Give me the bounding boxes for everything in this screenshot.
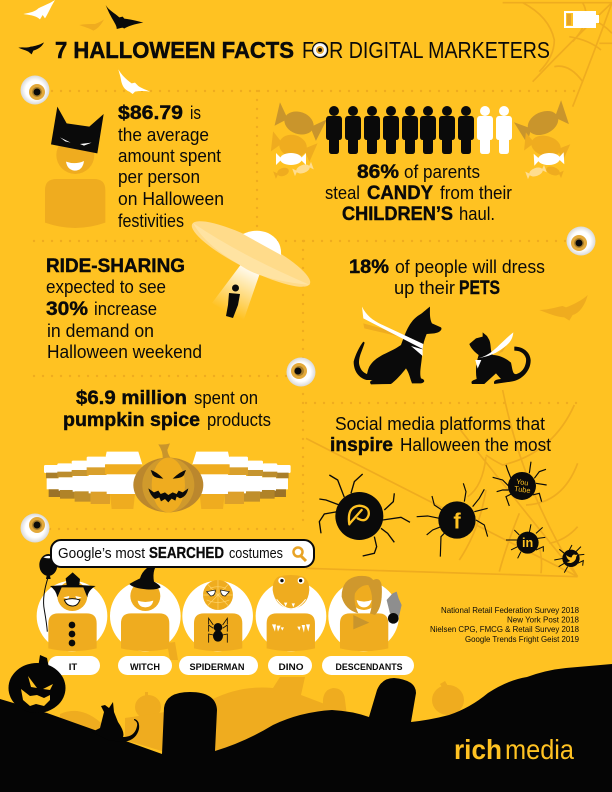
icon: Pinterest spider [319, 474, 410, 556]
title [55, 37, 550, 63]
costume labels: SPIDERMAN [190, 662, 245, 673]
icon: person in bat mask [45, 107, 105, 228]
icon: LinkedIn spider [506, 524, 545, 558]
icon: YouTube spider: You [516, 477, 529, 487]
sources: Nielsen CPG, FMCG & Retail Survey 2018 [430, 624, 579, 634]
panel: batman spending [45, 103, 224, 231]
text: pets stat: PETS [459, 278, 500, 299]
spider web: top right [503, 3, 612, 107]
text: social media heading: Halloween the most [400, 435, 551, 455]
text: pets stat [349, 257, 545, 299]
panel: social media spiders [319, 414, 584, 573]
icon: candies left [268, 102, 327, 179]
icon: battery [565, 12, 599, 27]
text: ride-sharing stat: 30% [46, 299, 88, 320]
icon: magnifier [294, 548, 306, 561]
icon: faint bat [539, 295, 588, 321]
black graveyard ground with tombstones [0, 664, 612, 792]
text: ride-sharing stat: Halloween weekend [47, 342, 202, 362]
text: pumpkin spice stat [63, 388, 271, 431]
icon: LinkedIn spider: in [522, 536, 533, 550]
icon: black jack-o-lantern [8, 655, 66, 713]
dotted dividers [34, 91, 578, 529]
icon: eyeball right [566, 226, 596, 256]
icon: abducted person [226, 284, 240, 318]
costume labels: WITCH [130, 662, 160, 673]
panel: ride-sharing [46, 211, 317, 362]
text: pumpkin spice stat: pumpkin spice [63, 410, 200, 431]
costume labels: DESCENDANTS [336, 662, 402, 673]
icon: row of ten people [326, 106, 512, 154]
icon: YouTube spider [493, 462, 547, 506]
icon: Facebook spider [417, 483, 488, 557]
text: candy stat: of parents [404, 162, 480, 182]
costume labels [48, 656, 414, 675]
text: pets stat: 18% [349, 257, 389, 278]
spider web: lower right [306, 390, 578, 577]
costume labels: IT [69, 662, 77, 673]
text: pumpkin spice stat: spent on [194, 388, 258, 408]
search bar: costumes [229, 545, 283, 562]
logo: richmedia [454, 734, 574, 765]
icon: dog and cat in capes [354, 307, 531, 384]
title: 7 HALLOWEEN FACTS [55, 37, 294, 63]
text: pets stat: up their [394, 278, 455, 298]
icon: eyeball top left [20, 76, 50, 104]
icon: candies right [514, 100, 572, 179]
text: ride-sharing stat: increase [94, 299, 157, 319]
text: ride-sharing stat: RIDE-SHARING [46, 256, 185, 277]
logo: richmedia: rich [454, 734, 502, 765]
costume: dino [267, 575, 315, 651]
text: social media heading: inspire [330, 435, 393, 456]
icon: eyeball lower left [20, 514, 50, 542]
text: candy stat: steal [325, 183, 360, 203]
text: candy stat: CHILDREN’S [342, 204, 453, 225]
panel: pumpkin spice [44, 388, 291, 512]
text: average spend: on Halloween [118, 189, 224, 209]
panel: parents steal candy [268, 100, 572, 225]
bats [18, 0, 150, 94]
text: ride-sharing stat [46, 256, 202, 362]
icon: Twitter spider [554, 545, 584, 573]
text: average spend: amount spent [118, 146, 221, 166]
sources: National Retail Federation Survey 2018 [441, 605, 579, 615]
background graveyard shapes [60, 642, 464, 752]
icon: YouTube spider: Tube [514, 484, 531, 495]
icon: eyeball middle [286, 358, 316, 386]
costume: balloon [39, 554, 57, 632]
text: average spend: festivities [118, 211, 184, 231]
text: ride-sharing stat: in demand on [47, 321, 154, 341]
costume: descendants [340, 576, 402, 651]
text: candy stat: haul. [459, 204, 495, 224]
sources [430, 605, 579, 644]
text: average spend [118, 103, 224, 231]
logo: richmedia: media [505, 734, 574, 765]
text: social media heading: Social media platforms that [335, 414, 545, 434]
text: pets stat: of people will dress [395, 257, 545, 277]
costume circles [37, 554, 402, 651]
text: social media heading [330, 414, 551, 456]
text: pumpkin spice stat: products [207, 410, 271, 430]
icon: Facebook spider: f [453, 508, 461, 533]
text: pumpkin spice stat: $6.9 million [76, 388, 187, 409]
search bar [51, 540, 314, 567]
costume: witch [121, 562, 169, 651]
panel: pets [349, 257, 588, 384]
sources: Google Trends Fright Geist 2019 [465, 634, 579, 644]
text: candy stat: 86% [357, 162, 399, 183]
title: FOR DIGITAL MARKETERS [302, 37, 550, 63]
text: candy stat [325, 162, 512, 225]
text: candy stat: CANDY [367, 183, 433, 204]
icon: UFO [185, 211, 317, 322]
icon: black cat [92, 702, 139, 742]
costume: IT clown [48, 572, 97, 651]
costume labels: DINO [278, 662, 304, 673]
text: ride-sharing stat: expected to see [46, 277, 166, 297]
text: average spend: $86.79 [118, 103, 183, 124]
icon: row of coffee cups and pumpkin [44, 443, 291, 512]
search bar: Google’s most [58, 545, 146, 562]
text: average spend: per person [118, 167, 200, 187]
sources: New York Post 2018 [507, 614, 579, 624]
text: average spend: is [190, 103, 201, 123]
text: candy stat: from their [440, 183, 512, 203]
icon: jack-o-lantern [133, 443, 203, 512]
panel: Google's most searched costumes [37, 540, 414, 675]
costume: spiderman [194, 580, 242, 651]
search bar: SEARCHED [149, 545, 224, 562]
text: average spend: the average [118, 125, 209, 145]
